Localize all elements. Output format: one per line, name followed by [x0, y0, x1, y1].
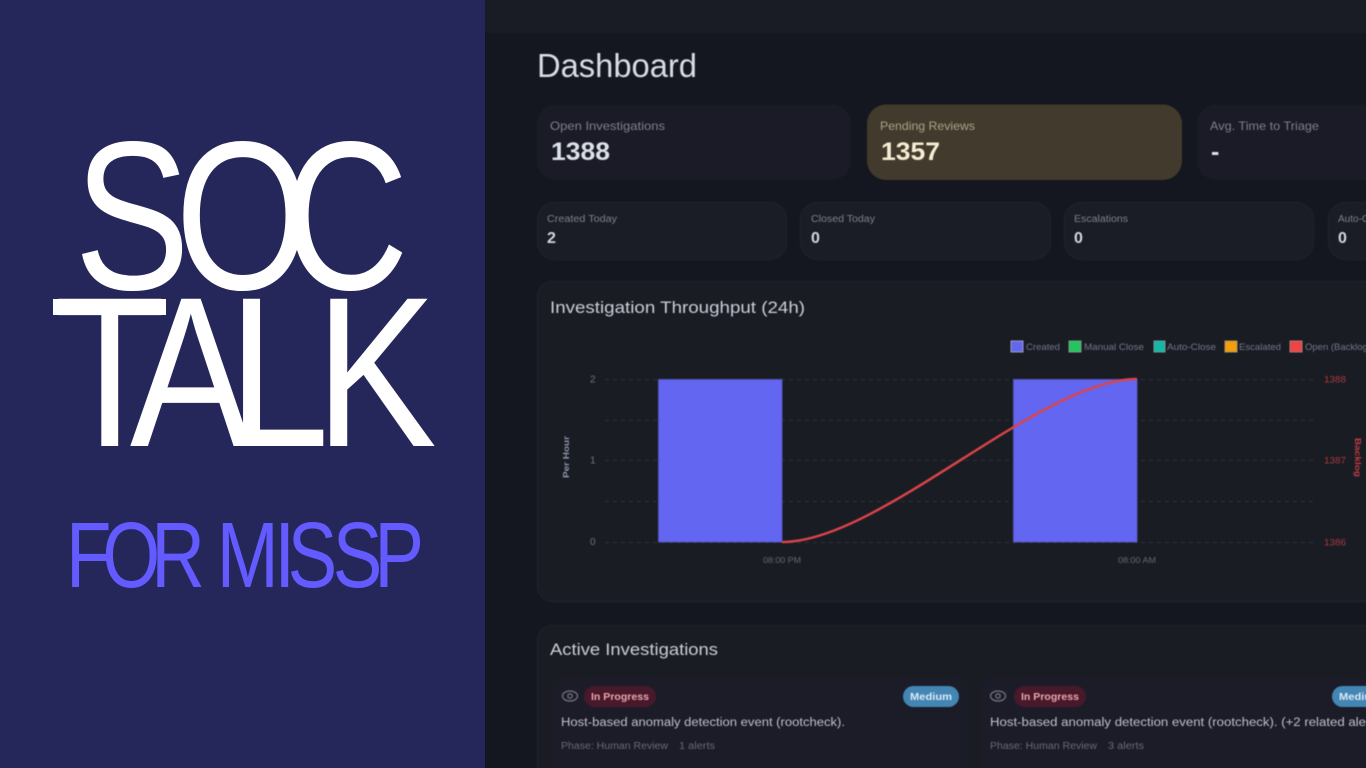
- chart heading: Investigation Throughput (24h): [550, 298, 805, 317]
- badge: Medium: Medium: [910, 691, 952, 703]
- badge: In Progress: In Progress: [591, 691, 649, 703]
- stat card: Open Investigations: 1388: [551, 138, 610, 166]
- stat card: Open Investigations: Open Investigations: [550, 119, 665, 133]
- small stat card: Auto-Closed: 0: [1338, 230, 1347, 247]
- top navigation bar: [485, 0, 1366, 33]
- right axis labels: 1388: [1324, 374, 1346, 386]
- heading: Dashboard: Dashboard: [537, 47, 697, 84]
- small stat card: Closed Today: 0: [811, 230, 820, 247]
- small stat card: Escalations: Escalations: [1074, 214, 1128, 225]
- badge: In Progress: In Progress: [1021, 691, 1079, 703]
- stat card: Avg. Time to Triage: -: [1211, 138, 1219, 166]
- title: SOC: SOC: [74, 99, 409, 335]
- stat card: Open Investigations: [537, 104, 851, 180]
- stat card: Pending Reviews: Pending Reviews: [880, 119, 975, 133]
- x axis labels: 08:00 PM: [763, 555, 801, 565]
- panel: Investigation Throughput chart: [538, 282, 1366, 602]
- right axis labels: 1386: [1324, 538, 1346, 548]
- stat card: Avg. Time to Triage: [1197, 104, 1366, 180]
- left axis labels: 1: [590, 456, 596, 466]
- panel: title sidebar: [0, 0, 485, 768]
- investigation meta: 1 alerts: [679, 741, 715, 752]
- panel heading: Active Investigations: [550, 640, 718, 659]
- small stat card: Closed Today: Closed Today: [811, 214, 875, 225]
- stat card: Pending Reviews: [867, 104, 1182, 180]
- investigation title: Host-based anomaly detection event (rootcheck).: [561, 717, 845, 729]
- subtitle: FOR MISSP: FOR MISSP: [66, 503, 424, 607]
- left axis labels: 2: [590, 374, 596, 386]
- investigation card 2: [981, 677, 1366, 768]
- chart legend: Created: [1026, 342, 1060, 353]
- small stat card: Auto-Closed: [1328, 202, 1366, 260]
- line: open backlog: [782, 379, 1137, 542]
- badge: Medium: [1332, 686, 1366, 707]
- investigation card 1: [551, 677, 968, 768]
- small stat card: Created Today: Created Today: [547, 214, 617, 225]
- investigation meta: Phase: Human Review: [990, 741, 1098, 752]
- chart legend: Escalated: [1239, 342, 1281, 353]
- badge: Medium: [903, 686, 959, 707]
- investigation meta: Phase: Human Review: [561, 741, 669, 752]
- right axis labels: [1324, 374, 1346, 548]
- investigation meta: [561, 741, 715, 752]
- investigation meta: 3 alerts: [1108, 741, 1144, 752]
- chart legend: [1011, 341, 1366, 353]
- investigation meta: [990, 741, 1144, 752]
- chart legend: Auto-Close: [1167, 342, 1216, 353]
- bar: created 08:00 AM: [1014, 380, 1137, 542]
- chart legend: Manual Close: [1084, 342, 1144, 353]
- x axis labels: 08:00 AM: [1118, 555, 1156, 565]
- small stat card: Closed Today: [800, 202, 1050, 260]
- stat card: Avg. Time to Triage: Avg. Time to Triage: [1210, 119, 1319, 133]
- left axis labels: [590, 374, 596, 548]
- small stat card: Created Today: 2: [547, 230, 556, 247]
- investigation title: Host-based anomaly detection event (rootcheck). (+2 related alerts): [990, 717, 1366, 729]
- x axis labels: [763, 555, 1156, 565]
- left axis title: Per Hour: [561, 435, 571, 478]
- small stat card: Created Today: [538, 202, 786, 260]
- left axis labels: 0: [590, 537, 596, 548]
- right axis title: Backlog: [1353, 438, 1363, 477]
- bar: created 08:00 PM: [658, 380, 782, 542]
- small stat card: Escalations: [1064, 202, 1314, 260]
- panel: Active Investigations: [538, 626, 1366, 768]
- title: TALK: TALK: [54, 253, 437, 492]
- icon: eye: [562, 691, 578, 701]
- panel: dashboard screenshot: [485, 0, 1366, 768]
- badge: In Progress: [1014, 686, 1086, 707]
- icon: eye: [990, 691, 1006, 701]
- stat card: Pending Reviews: 1357: [881, 138, 940, 166]
- chart grid lines: [605, 380, 1314, 542]
- small stat card: Escalations: 0: [1074, 230, 1083, 247]
- right axis labels: 1387: [1324, 456, 1346, 466]
- badge: In Progress: [584, 686, 656, 707]
